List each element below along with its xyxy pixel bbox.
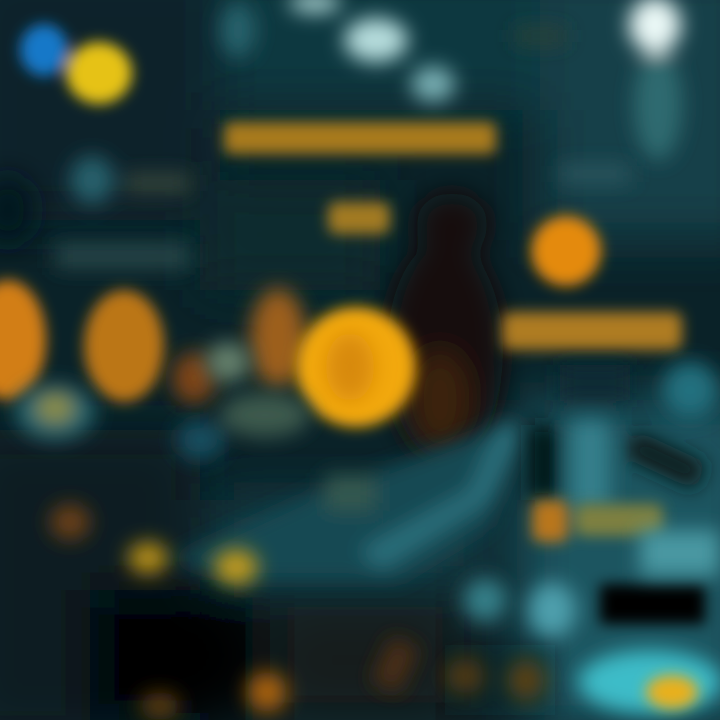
teal lower-left blob (15, 384, 310, 460)
heading bar (224, 122, 496, 154)
small orange ball (172, 352, 216, 404)
right lower teal pillars (463, 362, 718, 638)
lower diagonal band (170, 420, 525, 580)
subheading label (328, 202, 390, 234)
orange ovals row (0, 280, 306, 404)
orange oval 2 (84, 290, 164, 402)
dark bottom-right blocks (371, 636, 555, 715)
small top labels (515, 28, 630, 183)
large golden coin (296, 307, 416, 427)
right heading label (502, 312, 682, 350)
black box lower right (600, 584, 705, 624)
amber right label (532, 500, 663, 542)
orange circle right (531, 216, 601, 286)
orange oval 1 (0, 280, 46, 400)
bright cyan corner panel (578, 530, 720, 714)
left list panel (55, 2, 256, 268)
small amber dots (50, 504, 544, 720)
icon: blue and yellow capsule (20, 24, 132, 104)
ceiling lights (289, 0, 682, 160)
yellow corner badge (646, 675, 698, 709)
pale ball (206, 342, 250, 382)
dark central figure (0, 176, 503, 460)
orange oval 3 (250, 288, 306, 388)
